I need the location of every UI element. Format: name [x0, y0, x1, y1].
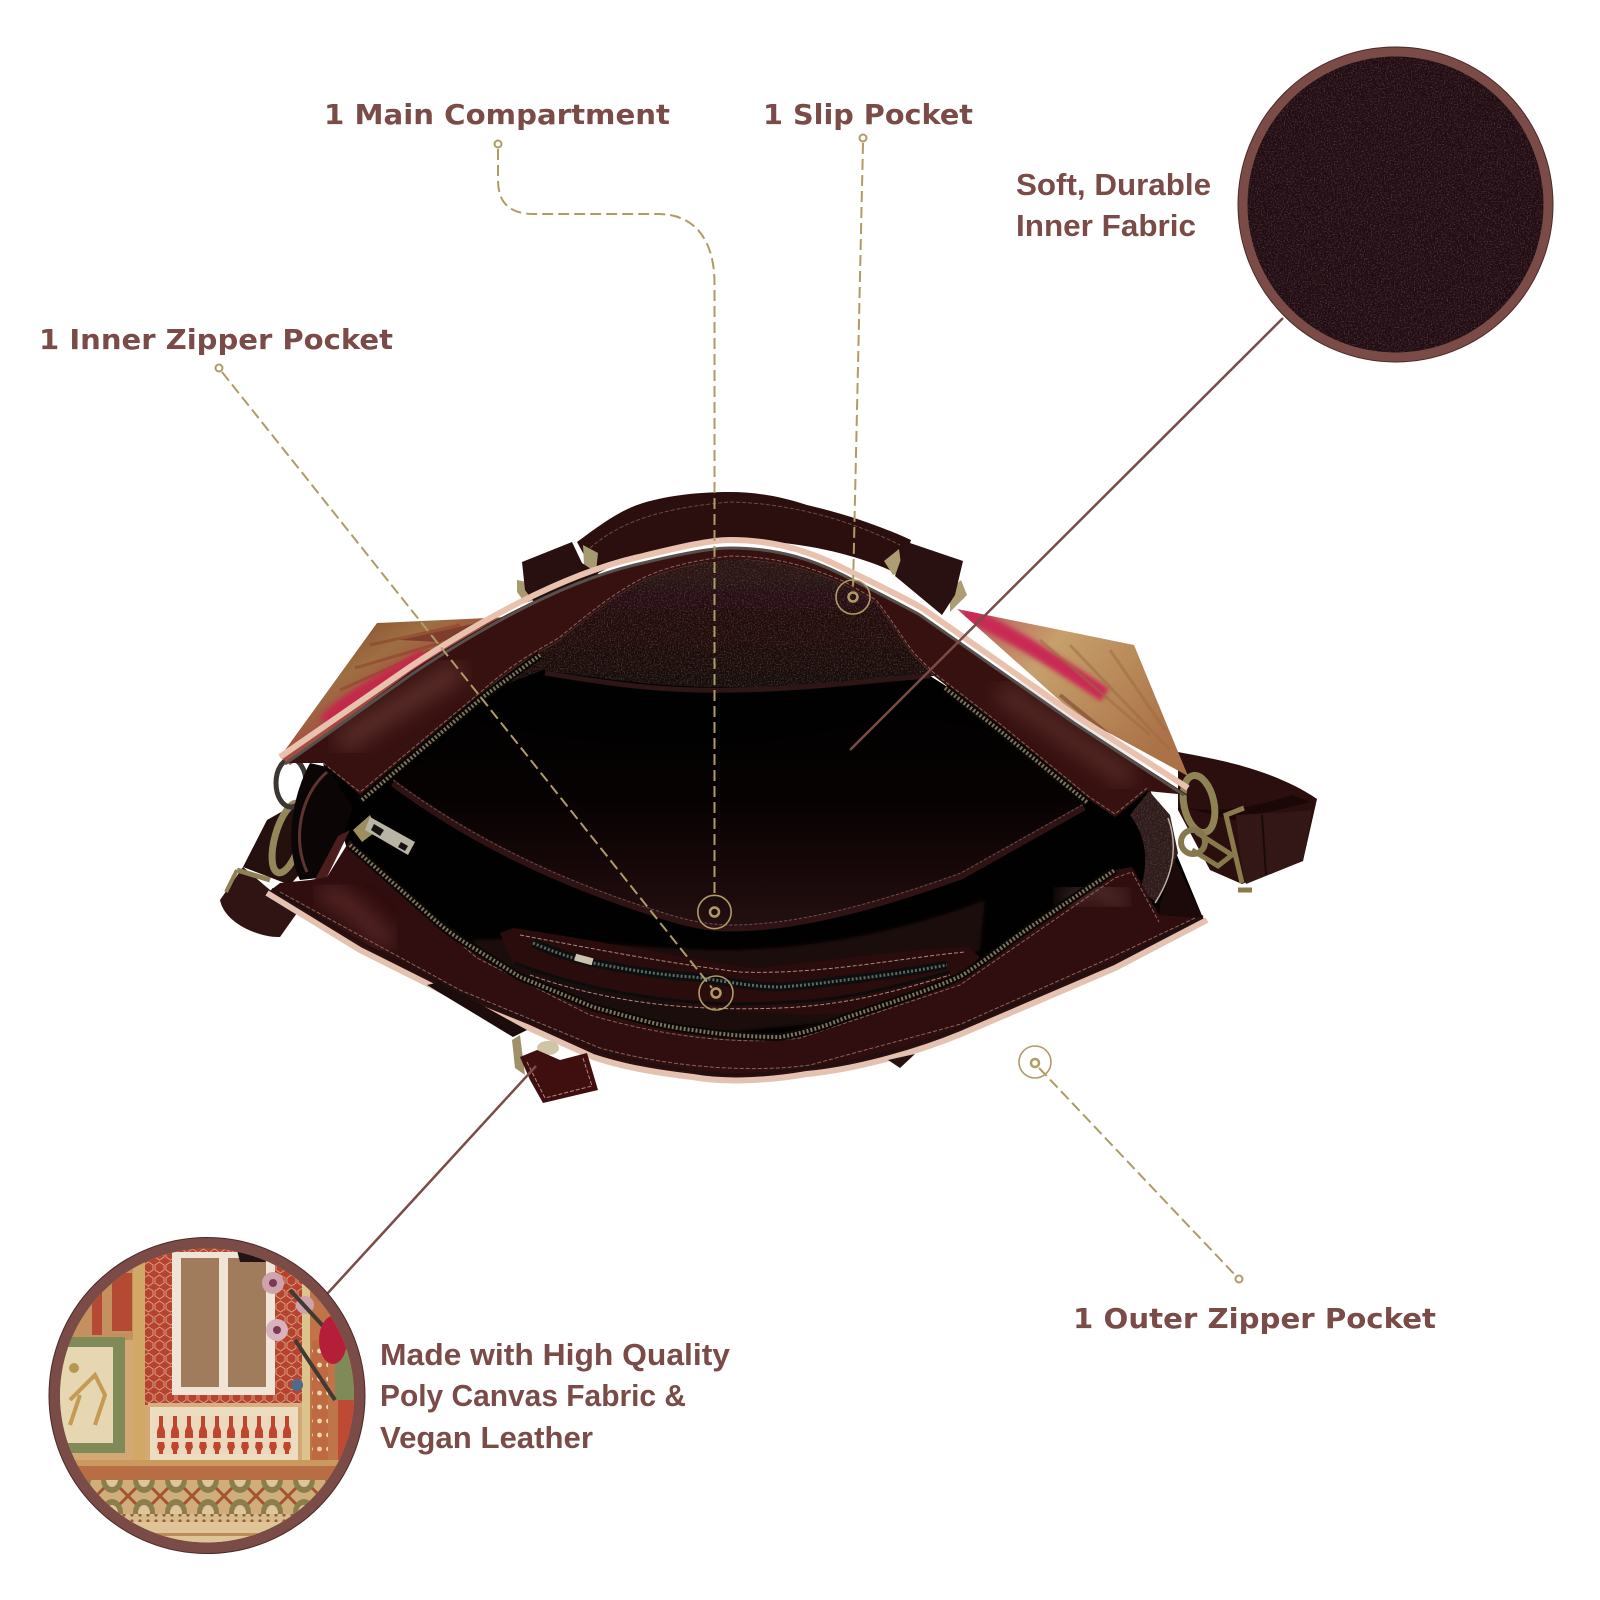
- painting: [60, 1337, 125, 1453]
- inner pocket panel: [393, 720, 1084, 928]
- label: soft durable inner fabric: Soft, Durable: [1016, 167, 1211, 202]
- bands: [75, 1460, 339, 1466]
- leader: main compartment: [494, 140, 731, 929]
- left gusset: [291, 763, 353, 880]
- interior suede upper lining: [483, 559, 934, 693]
- top rim: [280, 540, 1188, 788]
- balcony: [148, 1403, 302, 1407]
- left shoulder strap: [220, 759, 312, 937]
- zipper upper left: [360, 655, 540, 800]
- label: high quality canvas and vegan leather: Made with High Quality: [380, 1337, 731, 1372]
- leader line: outer fabric: [327, 1066, 536, 1294]
- label: soft durable inner fabric: [1016, 167, 1211, 243]
- bottom rim: [267, 893, 1207, 1080]
- handle tab right: [884, 542, 967, 615]
- label: 1 Slip Pocket: 1 Slip Pocket: [763, 98, 973, 131]
- zipper upper right: [945, 688, 1088, 803]
- zipper lower: [350, 845, 1115, 1037]
- bottom handle tab: [512, 1035, 598, 1103]
- handle tab left: [517, 542, 600, 610]
- leader: outer zipper pocket: [1019, 1046, 1242, 1282]
- label: high quality canvas and vegan leather: [380, 1337, 731, 1455]
- label: soft durable inner fabric: Inner Fabric: [1016, 208, 1196, 243]
- detail circle: suede inner fabric: [1238, 47, 1553, 362]
- label: 1 Outer Zipper Pocket: 1 Outer Zipper Pocket: [1073, 1302, 1436, 1335]
- right gusset: [1130, 791, 1178, 903]
- leader line: inner fabric: [850, 318, 1283, 750]
- label: 1 Main Compartment: 1 Main Compartment: [324, 98, 670, 131]
- top left stripes: [72, 1262, 145, 1340]
- upper leather flap: [280, 540, 1188, 817]
- right wall: [310, 1290, 354, 1472]
- leader: slip pocket: [836, 134, 870, 614]
- lower suede: [470, 900, 985, 1035]
- label: 1 Inner Zipper Pocket: 1 Inner Zipper Pocket: [39, 323, 393, 356]
- bag interior: [291, 550, 1203, 1040]
- window: [172, 1252, 275, 1395]
- leader: inner zipper pocket: [216, 364, 733, 1010]
- fold line: [545, 673, 930, 690]
- lower leather panel: [267, 840, 1207, 1080]
- top handle: [577, 492, 911, 575]
- zipper pull: [353, 815, 415, 855]
- underside edge: [427, 982, 527, 1037]
- zip pocket: [500, 928, 980, 1014]
- right shoulder strap: [1178, 752, 1317, 890]
- printed wing right: [957, 609, 1188, 776]
- bag photograph: [220, 492, 1317, 1103]
- detail circle: printed canvas: [48, 1237, 366, 1554]
- florals: [262, 1272, 284, 1294]
- label: high quality canvas and vegan leather: Poly Canvas Fabric &: [380, 1378, 686, 1413]
- hex wall: [145, 1240, 305, 1405]
- printed wing left: [280, 603, 540, 765]
- label: high quality canvas and vegan leather: Vegan Leather: [380, 1420, 593, 1455]
